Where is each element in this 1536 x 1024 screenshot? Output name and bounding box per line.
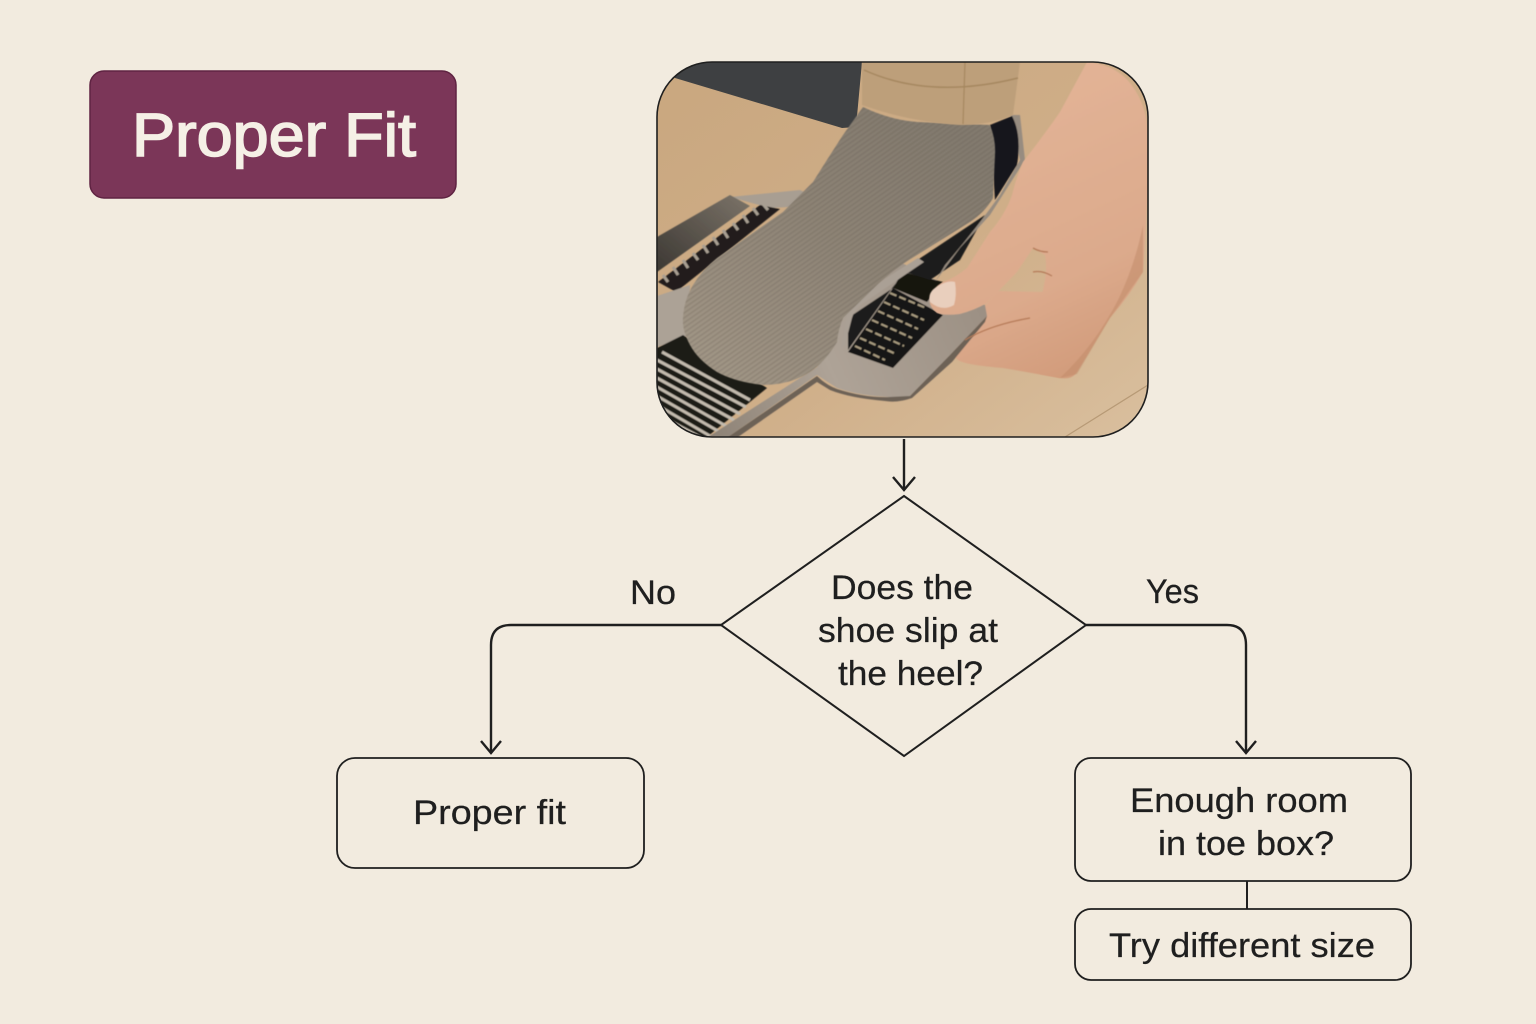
inner rim band [848,258,924,333]
decision diamond: Does the [831,569,973,607]
upper metal plate top [734,190,804,209]
lower ruler stripes [657,352,750,437]
tray body [708,262,987,437]
sock [683,107,995,385]
trousers cuff [862,62,1020,125]
upper ruler window [658,205,780,292]
dark slot above ruler [893,272,943,302]
wooden floor [657,62,1148,437]
knuckle creases [965,248,1052,340]
label: Yes: Yes [1146,573,1199,611]
lower ruler bed [657,335,767,437]
arrow: No branch [481,625,721,753]
box: enough room in toe box: in toe box? [1158,825,1334,863]
box: proper fit [337,758,644,868]
finger under tray [953,290,1090,378]
dark wall beside ruler [848,215,985,350]
upper left dark plate [657,195,750,272]
box: proper fit: Proper fit [413,794,567,832]
dark mat [672,62,862,128]
toe ruler ticks [855,293,926,360]
title badge [90,71,456,198]
arrow: Yes branch [1086,625,1256,753]
decision diamond: shoe slip at [818,612,999,650]
thumbnail [929,282,956,308]
title badge: Proper Fit [132,101,416,169]
label: No: No [630,574,676,612]
photo: foot on measuring device [657,62,1148,437]
box: try different size: Try different size [1109,927,1375,965]
tray front wall highlight [728,316,987,437]
light metal under upper ruler [657,285,690,347]
wood board seam [1065,385,1148,437]
box: enough room in toe box: Enough room [1130,782,1348,820]
box: try different size [1075,909,1411,980]
upper ruler ticks [663,204,768,282]
hand shadow [1060,225,1143,378]
connector: toe box to size [1246,881,1248,909]
box: enough room in toe box [1075,758,1411,881]
hand: thumb and palm [929,62,1148,378]
toe ruler window [848,288,943,368]
decision diamond [721,496,1086,756]
heel cup dark [990,116,1019,200]
decision diamond: the heel? [838,655,983,693]
outer rim band [935,115,1025,282]
arrow: photo to decision [893,439,915,490]
